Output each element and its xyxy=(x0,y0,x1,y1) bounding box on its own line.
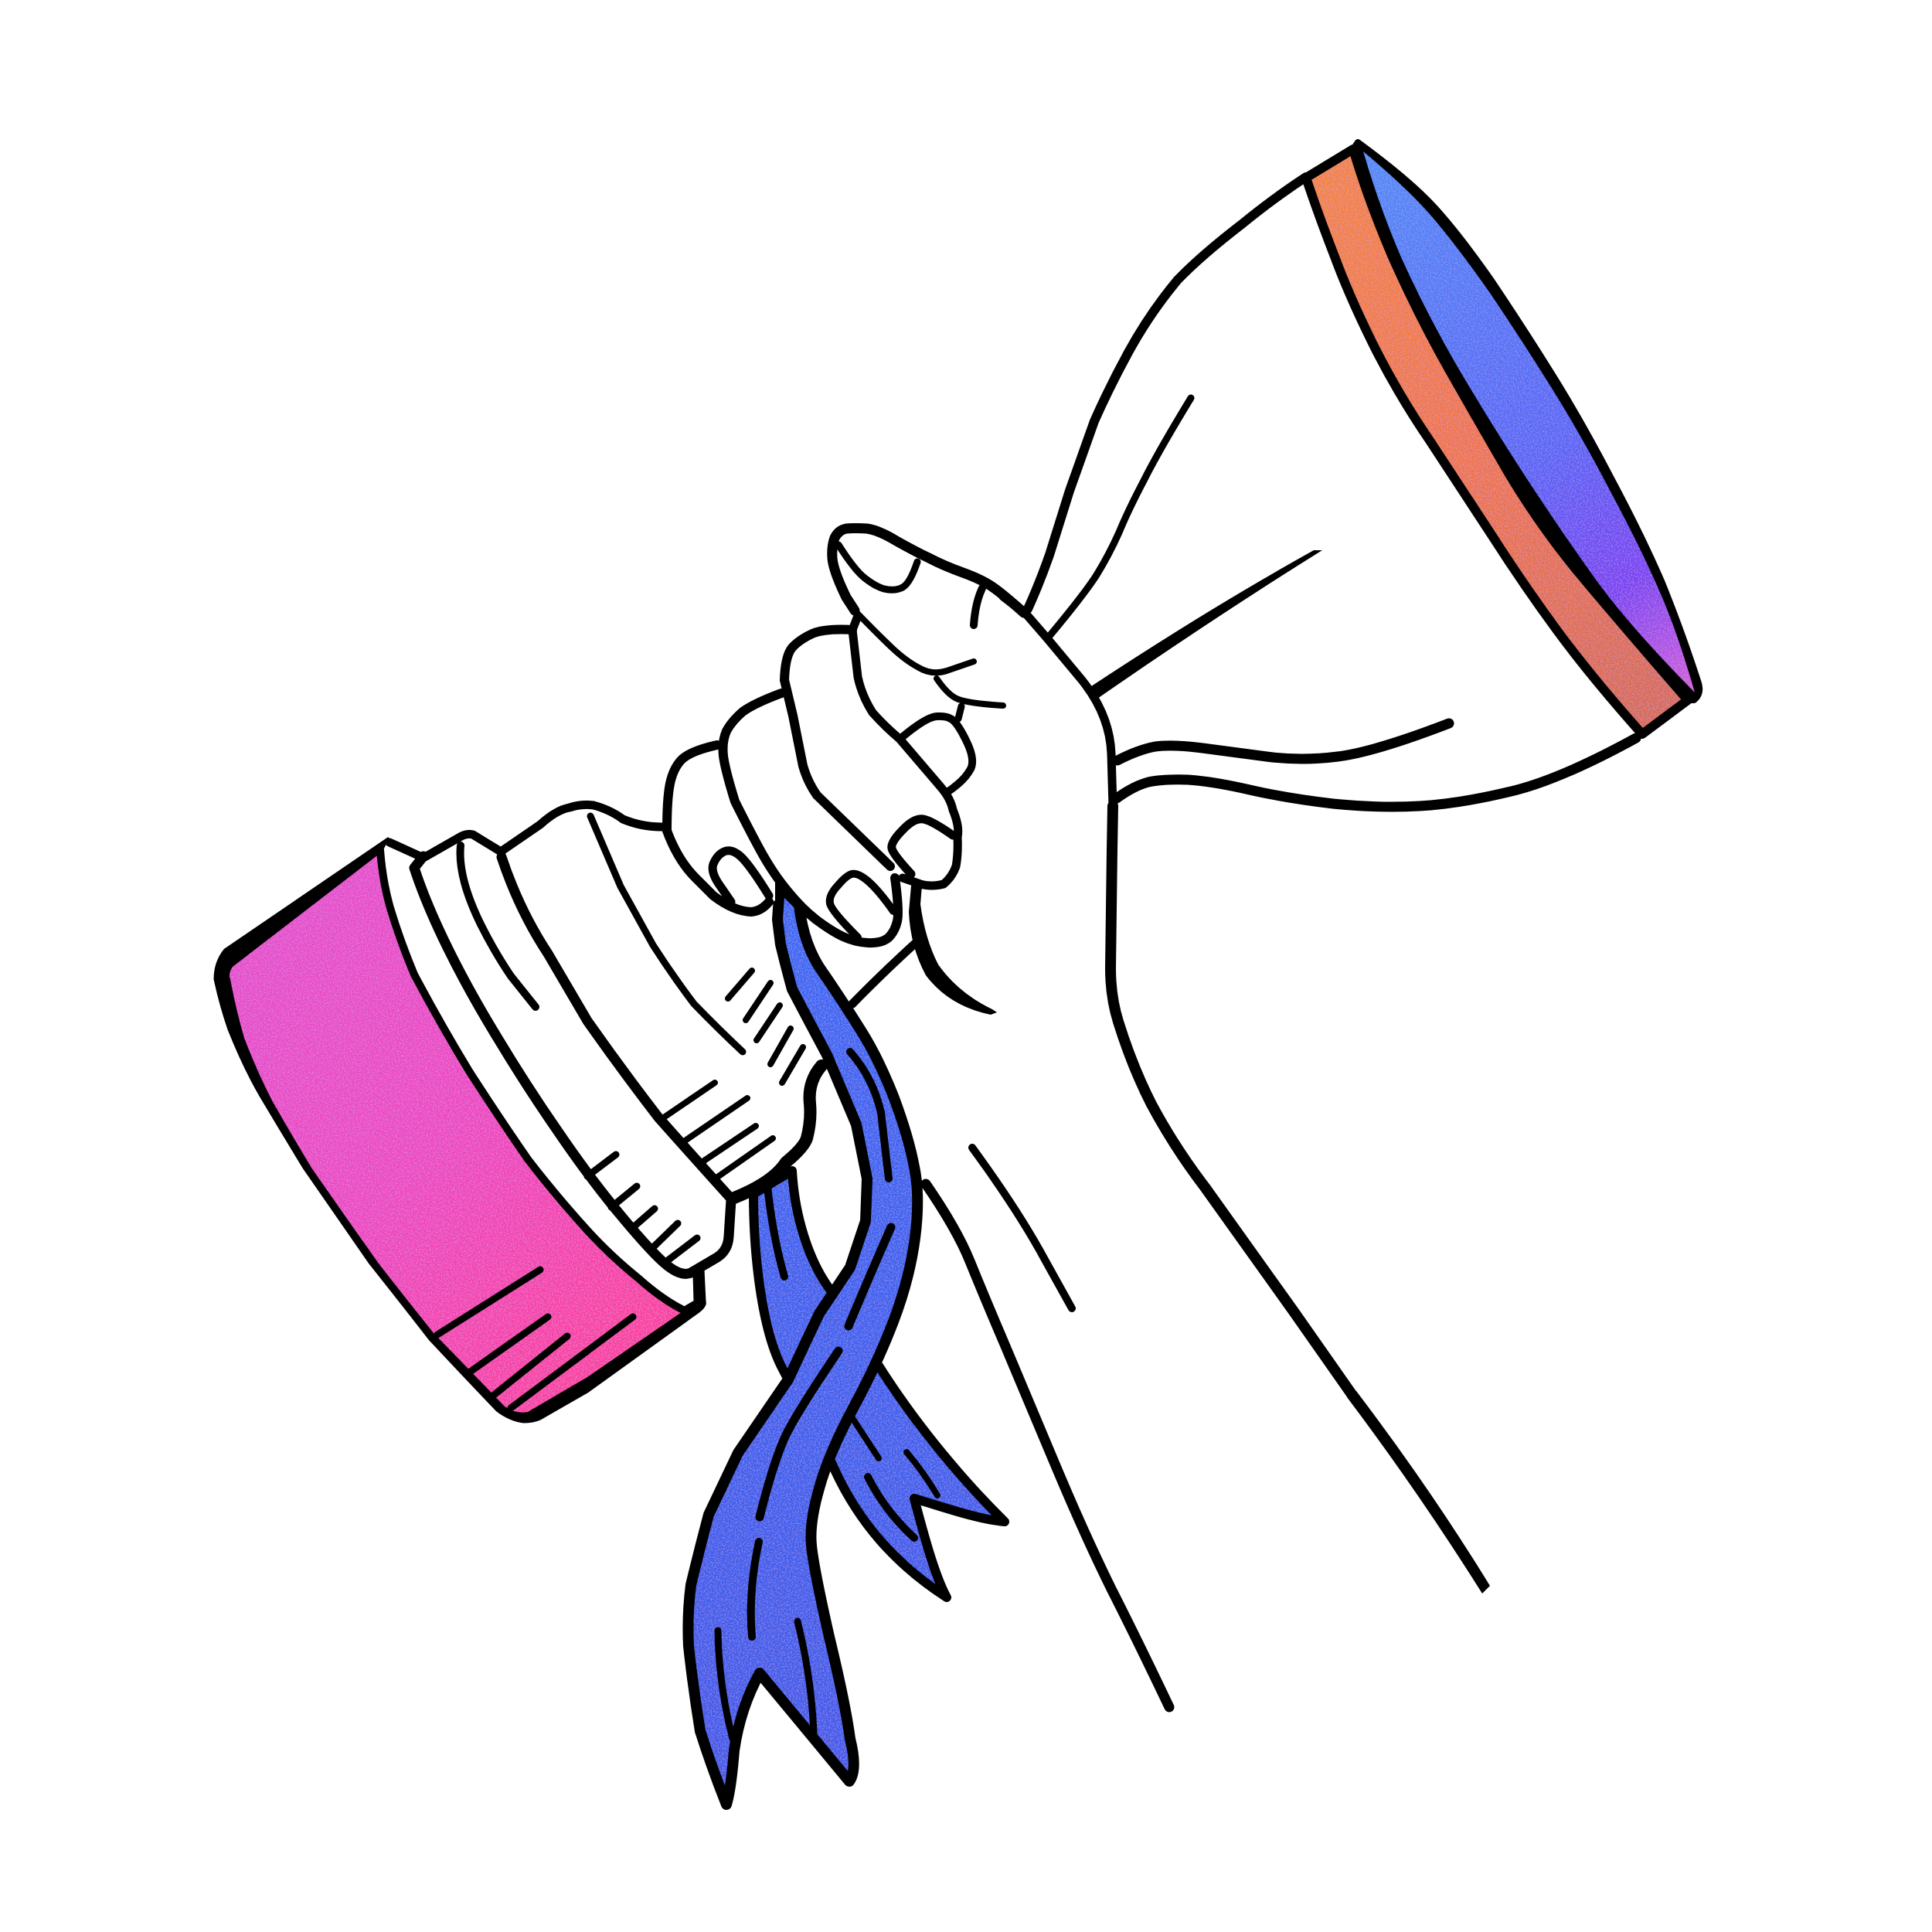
hatching on neck xyxy=(587,971,803,1260)
nail: upper finger xyxy=(892,819,953,874)
trophy base: pink block xyxy=(230,853,682,1413)
thumb nail xyxy=(838,545,917,590)
nail: middle finger xyxy=(830,874,893,937)
trophy cup: white bowl outline and folds xyxy=(1028,177,1636,807)
trophy neck: white collar over the ribbon with lines and hatching xyxy=(386,804,821,1309)
trophy base: edge line and hatching xyxy=(380,850,682,1408)
finger: upper xyxy=(784,630,890,866)
ribbon: front strand xyxy=(688,886,917,1804)
finger: middle xyxy=(724,693,900,944)
finger: upper right side xyxy=(852,616,958,886)
nail: lower finger xyxy=(713,851,769,902)
finger: behind thumb xyxy=(901,716,972,793)
finger: lower xyxy=(667,745,775,912)
trophy base: black backing xyxy=(215,838,705,1422)
cap join to fingers xyxy=(662,827,667,828)
thumb xyxy=(832,529,1024,613)
arm: outlines of wrist and forearm xyxy=(852,597,1490,1707)
ribbon: back strand xyxy=(753,1171,1005,1597)
trophy rim: orange band xyxy=(1306,149,1688,734)
ribbon: front strand fold lines xyxy=(718,1052,891,1739)
wrist crease beside fingers xyxy=(909,886,997,1015)
thumb creases xyxy=(937,679,1003,706)
hand: fingers, nails and thumb xyxy=(662,529,1024,1015)
trophy rim: black backing xyxy=(1353,142,1699,700)
trophy opening: blue to purple ellipse xyxy=(1363,151,1695,692)
